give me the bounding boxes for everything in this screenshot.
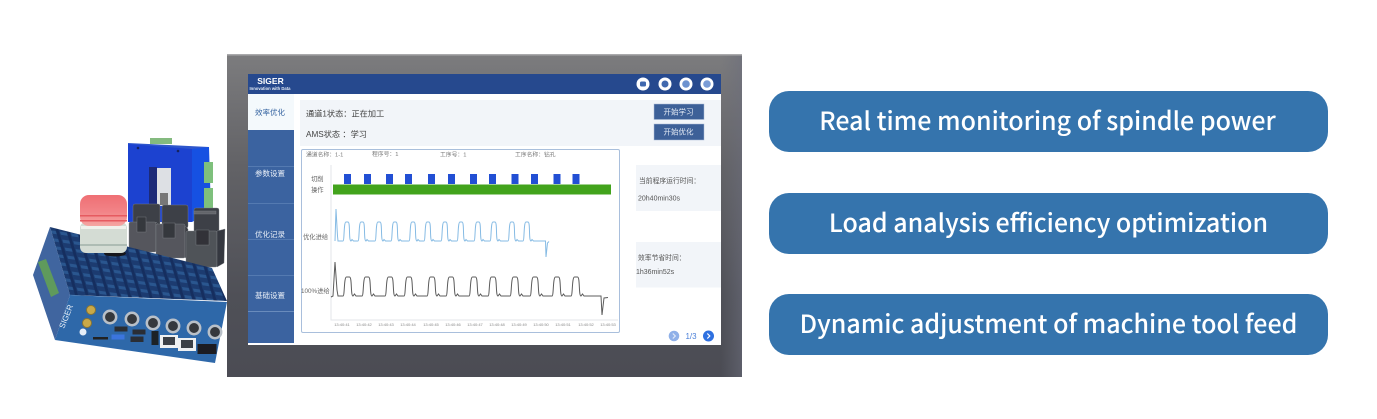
- sidebar: [248, 94, 294, 343]
- time axis labels: 13:40:51: [555, 322, 572, 327]
- time axis labels: 13:40:47: [467, 322, 484, 327]
- time saved panel: [636, 242, 721, 288]
- row labels: 100%进给: [301, 286, 330, 295]
- time axis labels: 13:40:50: [533, 322, 550, 327]
- blue data acquisition module: [128, 138, 213, 222]
- pill: spindle power: [769, 91, 1328, 152]
- aviation connectors: [104, 311, 221, 338]
- full feed line: [331, 262, 608, 315]
- start learning button: [654, 104, 704, 120]
- cutting green bar: [333, 184, 611, 194]
- time axis labels: 13:40:43: [378, 322, 395, 327]
- optimized feed line: [335, 209, 549, 257]
- time axis labels: 13:40:53: [600, 322, 617, 327]
- time axis labels: 13:40:42: [356, 322, 373, 327]
- side body face: [33, 227, 70, 340]
- pill: feed adjustment: [769, 294, 1328, 355]
- time axis labels: [334, 322, 617, 327]
- time axis labels: 13:40:48: [489, 322, 506, 327]
- main edge computing unit: [33, 227, 227, 363]
- time axis labels: 13:40:45: [423, 322, 440, 327]
- time saved panel: 1h36min52s: [636, 269, 675, 276]
- operation blue bars: [344, 174, 580, 184]
- run time panel: 20h40min30s: [638, 196, 681, 202]
- header icons: [636, 78, 714, 90]
- signal tower lamp: [80, 195, 127, 256]
- start optimization button: 开始优化: [664, 126, 694, 136]
- brand text: SIGER: [58, 303, 75, 330]
- tagline: Innovation with Data: [250, 86, 291, 91]
- status panel: AMS状态 ：学习: [306, 129, 367, 139]
- run time panel: 当前程序运行时间：: [639, 176, 700, 185]
- pagination: [669, 330, 714, 342]
- ethernet ports: [160, 335, 196, 351]
- row labels: 切削: [311, 174, 324, 183]
- heat sink fins top: [50, 227, 227, 301]
- status panel: [300, 100, 721, 146]
- row labels: [301, 174, 330, 295]
- sidebar: 参数设置: [255, 168, 285, 178]
- row labels: 优化进给: [303, 232, 329, 241]
- screen: [248, 74, 721, 345]
- start learning button: 开始学习: [664, 106, 694, 116]
- sidebar: 基础设置: [255, 290, 285, 300]
- pill: feed adjustment: Dynamic adjustment of machine tool feed: [800, 305, 1297, 341]
- run time panel: [636, 165, 721, 211]
- time saved panel: 效率节省时间：: [638, 253, 686, 262]
- antenna connectors: [82, 306, 96, 328]
- start optimization button: [654, 124, 704, 140]
- pill: load analysis: Load analysis efficiency optimization: [829, 204, 1268, 240]
- chart info row: 程序号：1: [372, 150, 398, 158]
- monitor bezel: [227, 54, 742, 377]
- chart info row: [306, 150, 556, 158]
- chart info row: 工序名称：钻孔: [515, 150, 556, 158]
- pagination: 1/3: [685, 332, 697, 341]
- header bar: [248, 74, 721, 94]
- axes: [331, 165, 618, 320]
- time axis labels: 13:40:44: [400, 322, 417, 327]
- touchscreen monitor: [227, 54, 742, 377]
- front panel: [55, 295, 227, 363]
- row labels: 操作: [311, 185, 324, 194]
- power connector: [198, 344, 216, 354]
- feature pills: [769, 91, 1328, 355]
- chart info row: 工序号：1: [440, 150, 466, 158]
- time axis labels: 13:40:46: [445, 322, 462, 327]
- logo badge: [80, 328, 86, 336]
- hardware devices group: [33, 138, 227, 363]
- time axis labels: 13:40:49: [511, 322, 528, 327]
- pill: load analysis: [769, 193, 1328, 254]
- sidebar labels: 效率优化: [255, 107, 285, 117]
- USB and HDMI ports: [93, 326, 158, 345]
- side terminal block: [38, 259, 59, 297]
- current transformer clamps: [129, 204, 225, 267]
- chart panel: [301, 150, 620, 332]
- brand: SIGER: [257, 76, 284, 86]
- pill: spindle power: Real time monitoring of spindle power: [819, 102, 1277, 138]
- status text: 通道1状态：正在加工: [306, 108, 384, 118]
- time axis labels: 13:40:41: [334, 322, 351, 327]
- sidebar: 优化记录: [255, 229, 285, 239]
- chart info row: 通道名称：1-1: [306, 150, 343, 158]
- time axis labels: 13:40:52: [578, 322, 595, 327]
